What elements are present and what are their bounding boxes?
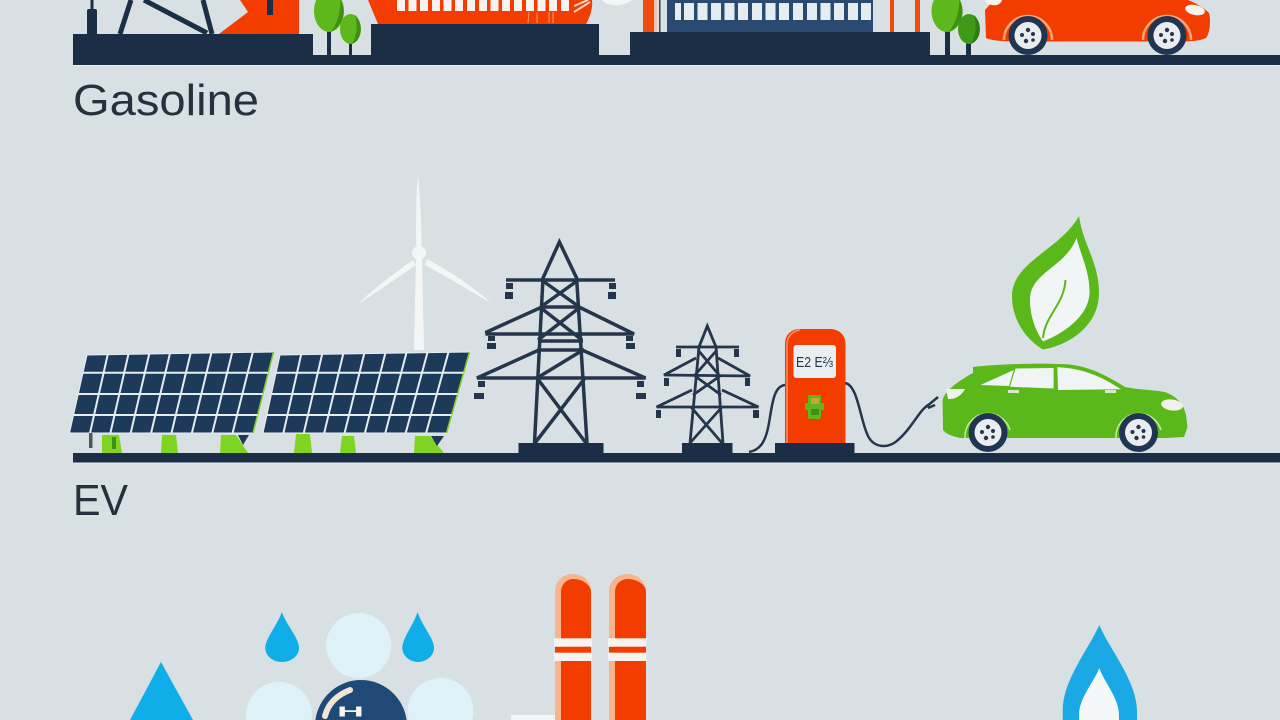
hydrogen atom circle: H — [337, 704, 364, 720]
large water drop right — [1063, 625, 1137, 720]
label: Gasoline: Gasoline — [73, 76, 259, 125]
left hydrogen stack — [554, 574, 592, 720]
rear wheel — [1148, 16, 1186, 55]
storage base — [511, 715, 557, 720]
trees right — [931, 0, 980, 56]
EV ground line — [73, 453, 1280, 464]
label: EV: EV — [73, 476, 129, 525]
tower base small — [682, 443, 732, 454]
hydrogen pathway illustration — [130, 574, 1137, 720]
green leaf — [1012, 216, 1099, 350]
gasoline ground and platforms — [73, 24, 1280, 66]
hydrogen molecule pale circles — [246, 613, 474, 720]
trees left — [314, 0, 361, 56]
solar panel right — [263, 352, 470, 433]
tower base large — [518, 443, 604, 454]
large transmission tower — [474, 242, 646, 443]
solar panel supports — [89, 433, 444, 453]
gasoline pathway illustration — [73, 0, 1280, 66]
small transmission tower — [656, 326, 759, 443]
oil rig — [87, 0, 212, 35]
water drop triangle left — [130, 662, 193, 720]
charging station — [775, 329, 854, 454]
front wheel — [1008, 16, 1048, 55]
front wheel — [968, 413, 1008, 452]
insulators — [474, 283, 646, 399]
red gasoline car — [985, 0, 1210, 55]
oil tank orange building — [219, 0, 299, 34]
solar panel left — [70, 352, 274, 433]
rear wheel — [1119, 413, 1158, 452]
refinery — [643, 0, 920, 32]
wind turbine — [358, 175, 491, 350]
tanker ship — [368, 0, 592, 24]
right hydrogen stack — [608, 574, 646, 720]
charging cables — [749, 383, 938, 452]
smoke puff — [602, 0, 632, 5]
charger plug icon — [805, 395, 824, 419]
green electric car — [943, 364, 1188, 452]
charger screen: E2 E⅔ — [796, 354, 833, 371]
hydrogen atom circle — [315, 680, 407, 720]
small water drop right — [402, 612, 434, 662]
small water drop left — [265, 612, 299, 662]
EV pathway illustration — [70, 175, 1280, 464]
car windows — [980, 367, 1121, 390]
